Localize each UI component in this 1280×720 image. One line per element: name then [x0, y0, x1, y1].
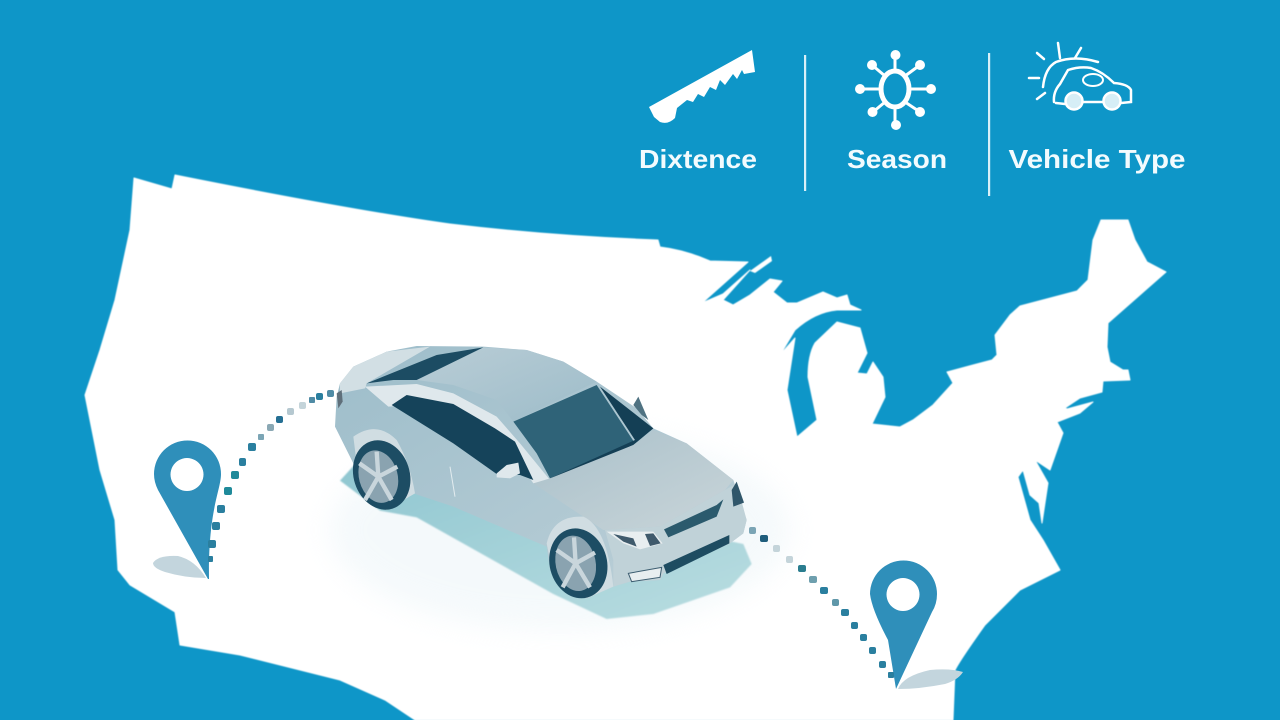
wing mirror — [497, 463, 520, 478]
lake island — [750, 256, 772, 273]
icon: ruler — [649, 50, 755, 123]
far mirror — [633, 397, 648, 420]
dotted route from car to right pin — [749, 527, 894, 678]
roof — [417, 347, 597, 422]
left pin body — [154, 440, 221, 579]
divider two — [988, 53, 990, 196]
grille — [664, 499, 723, 537]
windshield — [513, 385, 635, 478]
factor: distance — [639, 50, 757, 174]
label: vehicle type: Vehicle Type — [1008, 144, 1186, 174]
rear wheel — [344, 433, 419, 517]
front wheel arch — [547, 517, 613, 598]
label: season: Season — [847, 144, 947, 174]
rear wheel arch — [353, 429, 415, 510]
map of the United States — [85, 175, 1166, 720]
headlight detail — [613, 533, 661, 547]
rear deck — [340, 347, 430, 393]
rear light — [337, 390, 343, 408]
car body — [335, 346, 747, 598]
divider one — [804, 55, 806, 191]
hood — [533, 430, 733, 530]
roof rail — [365, 384, 550, 483]
factor: vehicle type — [1008, 43, 1186, 174]
car illustration — [335, 346, 752, 619]
right location pin — [870, 560, 963, 689]
icon: season sun — [855, 50, 936, 130]
left pin shadow — [153, 556, 206, 578]
right pin shadow — [898, 669, 963, 689]
side window — [392, 395, 533, 480]
car ground shadow — [340, 462, 752, 619]
factor: season — [847, 50, 947, 174]
icon: sun and car — [1029, 43, 1131, 110]
lower grille — [663, 535, 729, 574]
dotted route from left pin to car — [208, 390, 334, 562]
front bumper — [605, 483, 747, 587]
label: distance: Dixtence — [639, 144, 757, 174]
left location pin — [153, 440, 221, 579]
right headlight — [732, 482, 744, 507]
headlight — [607, 532, 663, 549]
fog lamp — [628, 567, 662, 582]
soft ground glow around car — [330, 430, 790, 630]
rear window — [367, 347, 483, 383]
right pin body — [870, 560, 937, 689]
windshield edge — [550, 387, 653, 478]
front wheel — [541, 522, 615, 605]
door line — [450, 467, 455, 497]
